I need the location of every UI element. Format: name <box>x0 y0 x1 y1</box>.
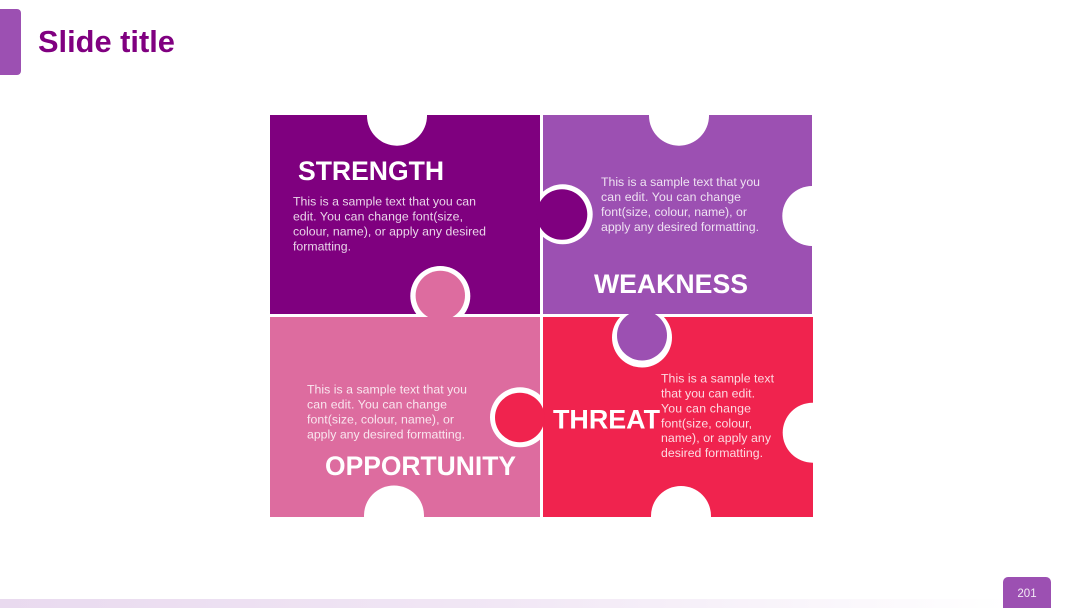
text block: opportunity: font(size, colour, name), or <box>307 412 454 426</box>
page number badge: 201 <box>1017 588 1037 600</box>
panel: opportunity <box>270 317 540 517</box>
text block: weakness: can edit. You can change <box>601 190 741 204</box>
text block: strength <box>293 194 486 254</box>
puzzle knob: strength into weakness <box>537 189 587 240</box>
heading: opportunity: OPPORTUNITY <box>325 451 516 481</box>
text block: weakness: apply any desired formatting. <box>601 220 759 234</box>
text block: threat <box>661 372 775 460</box>
puzzle knob: threat into opportunity <box>495 393 545 442</box>
text block: weakness <box>601 175 760 234</box>
puzzle knob: weakness into threat <box>617 310 667 360</box>
text block: weakness: font(size, colour, name), or <box>601 205 747 219</box>
puzzle knob: opportunity into strength <box>416 271 465 320</box>
text block: threat: name), or apply any <box>661 431 772 445</box>
text block: opportunity: can edit. You can change <box>307 397 447 411</box>
text block: strength: edit. You can change font(size, <box>293 210 463 224</box>
heading: threat: THREAT <box>553 404 660 434</box>
title accent tab <box>0 9 21 75</box>
page number badge <box>1003 577 1051 608</box>
text block: threat: font(size, colour, <box>661 416 752 430</box>
text block: opportunity: This is a sample text that you <box>307 382 467 396</box>
text block: opportunity <box>307 382 467 441</box>
text block: strength: colour, name), or apply any desired <box>293 224 486 238</box>
text block: strength: formatting. <box>293 240 351 254</box>
panel: strength <box>270 115 540 314</box>
heading: strength: STRENGTH <box>298 156 444 186</box>
text block: threat: This is a sample text <box>661 372 775 386</box>
panel: weakness <box>543 115 812 314</box>
text block: threat: that you can edit. <box>661 386 755 400</box>
text block: threat: desired formatting. <box>661 446 763 460</box>
footer gradient band <box>0 599 1010 608</box>
title: Slide title <box>38 24 175 59</box>
text block: strength: This is a sample text that you can <box>293 194 476 208</box>
text block: opportunity: apply any desired formatting. <box>307 427 465 441</box>
heading: weakness: WEAKNESS <box>594 269 748 299</box>
panel: threat <box>543 317 813 517</box>
text block: weakness: This is a sample text that you <box>601 175 760 189</box>
text block: threat: You can change <box>661 402 751 416</box>
